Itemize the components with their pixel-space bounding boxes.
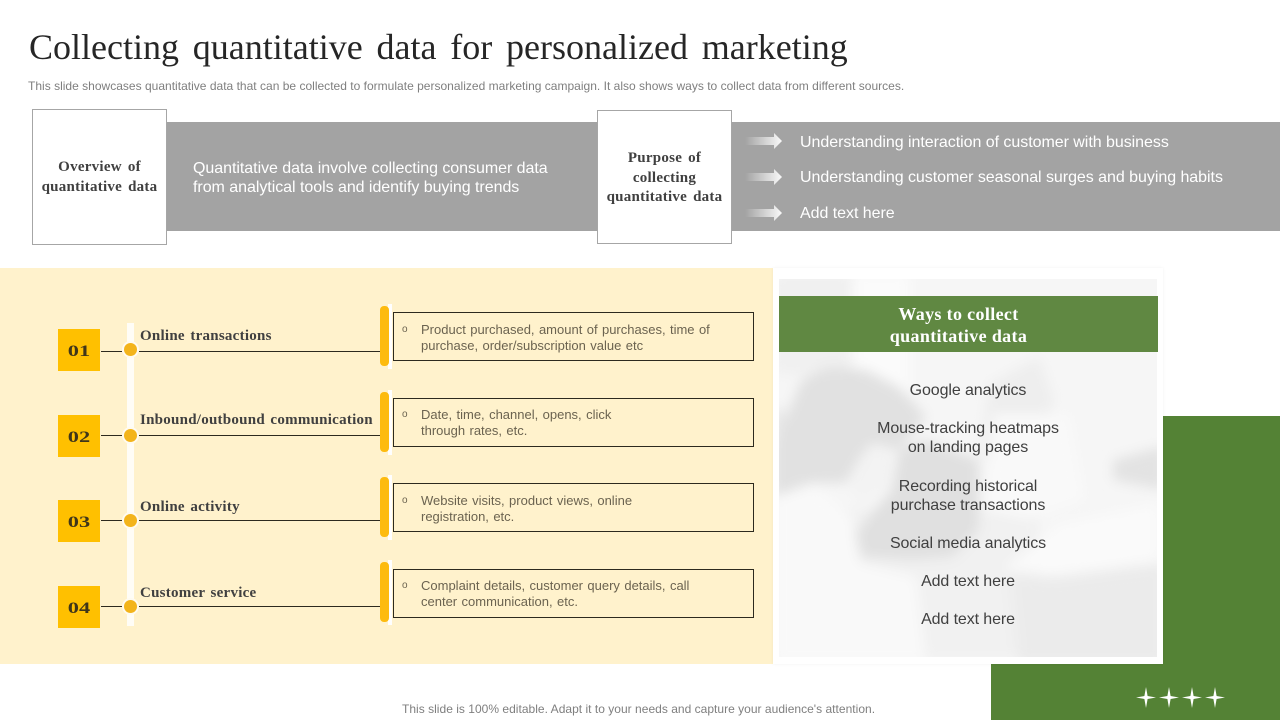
bracket 03 — [380, 477, 389, 537]
panel: purpose band — [731, 122, 1280, 231]
connector 03 long — [139, 520, 381, 521]
detail text 03: registration, etc. — [421, 509, 514, 524]
text block: overview description — [193, 160, 548, 196]
timeline rail — [127, 323, 134, 626]
panel: purpose label box — [597, 110, 732, 244]
bracket 01 white edge — [388, 304, 392, 369]
bracket 04 — [380, 562, 389, 622]
label: online transactions: Online transactions — [140, 328, 272, 344]
way: google analytics: Google analytics — [910, 382, 1026, 399]
connector 03 — [101, 520, 122, 521]
icon: arrow 2 — [748, 169, 782, 185]
heading band: ways to collect quantitative data — [779, 296, 1158, 352]
timeline dot 01 — [124, 343, 136, 356]
label: inbound/outbound communication: Inbound/outbound communication — [140, 412, 373, 428]
panel: overview label box — [32, 109, 167, 245]
detail box 04 — [393, 569, 754, 618]
detail text 01 — [421, 322, 710, 353]
heading: purpose of collecting quantitative data: collecting — [633, 170, 696, 186]
way: add text 2: Add text here — [921, 611, 1015, 628]
bracket 03 white edge — [388, 475, 392, 540]
connector 01 — [101, 351, 122, 352]
panel: cream data types panel — [0, 268, 773, 664]
way: recording historical: purchase transactions — [891, 497, 1045, 514]
connector 04 long — [139, 606, 381, 607]
subtitle: This slide showcases quantitative data that can be collected to formulate personalized marketing campaign. It also shows ways to collect data from different sources. — [28, 79, 904, 93]
way: recording historical — [891, 478, 1045, 514]
detail box 02 — [393, 398, 754, 447]
bullet 03: o — [402, 495, 408, 506]
bracket 01 — [380, 306, 389, 366]
faded photo background — [779, 279, 1157, 657]
heading: purpose of collecting quantitative data — [607, 150, 722, 205]
way: mouse-tracking heatmaps: on landing pages — [908, 439, 1028, 456]
detail text 04 — [421, 578, 689, 609]
heading: purpose of collecting quantitative data: quantitative data — [607, 189, 722, 205]
icon: four sparkles — [1136, 687, 1225, 708]
heading: overview of quantitative data: quantitative data — [42, 178, 157, 194]
number badge 02: 02 — [68, 429, 90, 446]
way: recording historical: Recording historical — [899, 478, 1037, 495]
bullet 01: o — [402, 324, 408, 335]
text: purpose item 3: Add text here — [800, 205, 895, 222]
label: online activity: Online activity — [140, 499, 240, 515]
text: purpose item 1: Understanding interaction of customer with business — [800, 134, 1169, 151]
label: customer service: Customer service — [140, 585, 256, 601]
number badge 02 — [58, 415, 100, 457]
connector 02 long — [139, 435, 381, 436]
timeline dot 02 — [124, 429, 136, 442]
heading text — [890, 304, 1027, 346]
way: add text 1: Add text here — [921, 573, 1015, 590]
detail box 03 — [393, 483, 754, 532]
timeline dot 03 — [124, 514, 136, 527]
bracket 02 — [380, 392, 389, 452]
panel: overview band — [166, 122, 598, 231]
detail text 02: Date, time, channel, opens, click — [421, 407, 611, 422]
heading text: Ways to collect — [898, 304, 1019, 324]
footer note: This slide is 100% editable. Adapt it to your needs and capture your audience's attention. — [402, 702, 875, 716]
bracket 02 white edge — [388, 390, 392, 455]
detail text 04: Complaint details, customer query details, call — [421, 578, 689, 593]
text block: overview description: Quantitative data involve collecting consumer data — [193, 160, 548, 177]
number badge 04 — [58, 586, 100, 628]
panel: ways to collect — [773, 268, 1163, 664]
icon: arrow 3 — [748, 205, 782, 221]
icon: arrow 1 — [748, 133, 782, 149]
way: mouse-tracking heatmaps: Mouse-tracking heatmaps — [877, 420, 1059, 437]
text: purpose item 2: Understanding customer seasonal surges and buying habits — [800, 169, 1223, 186]
detail text 03 — [421, 493, 632, 524]
number badge 04: 04 — [68, 600, 90, 617]
bullet 02: o — [402, 409, 408, 420]
detail text 02 — [421, 407, 612, 438]
number badge 03 — [58, 500, 100, 542]
heading: overview of quantitative data: Overview of — [58, 159, 141, 175]
detail text 01: purchase, order/subscription value etc — [421, 338, 643, 353]
title: Collecting quantitative data for personalized marketing — [29, 27, 848, 67]
bracket 04 white edge — [388, 560, 392, 625]
number badge 03: 03 — [68, 514, 90, 531]
connector 01 long — [139, 351, 381, 352]
heading: purpose of collecting quantitative data: Purpose of — [628, 150, 701, 166]
detail text 03: Website visits, product views, online — [421, 493, 632, 508]
panel: green corner block — [991, 416, 1280, 720]
heading text: quantitative data — [890, 326, 1027, 346]
way: mouse-tracking heatmaps — [877, 420, 1059, 456]
text block: overview description: from analytical tools and identify buying trends — [193, 179, 519, 196]
number badge 01: 01 — [68, 343, 90, 360]
connector 04 — [101, 606, 122, 607]
detail text 02: through rates, etc. — [421, 423, 527, 438]
detail box 01 — [393, 312, 754, 361]
timeline dot 04 — [124, 600, 136, 613]
connector 02 — [101, 435, 122, 436]
detail text 04: center communication, etc. — [421, 594, 578, 609]
way: social media analytics: Social media analytics — [890, 535, 1046, 552]
heading: overview of quantitative data — [42, 159, 157, 194]
detail text 01: Product purchased, amount of purchases, time of — [421, 322, 710, 337]
bullet 04: o — [402, 580, 408, 591]
number badge 01 — [58, 329, 100, 371]
